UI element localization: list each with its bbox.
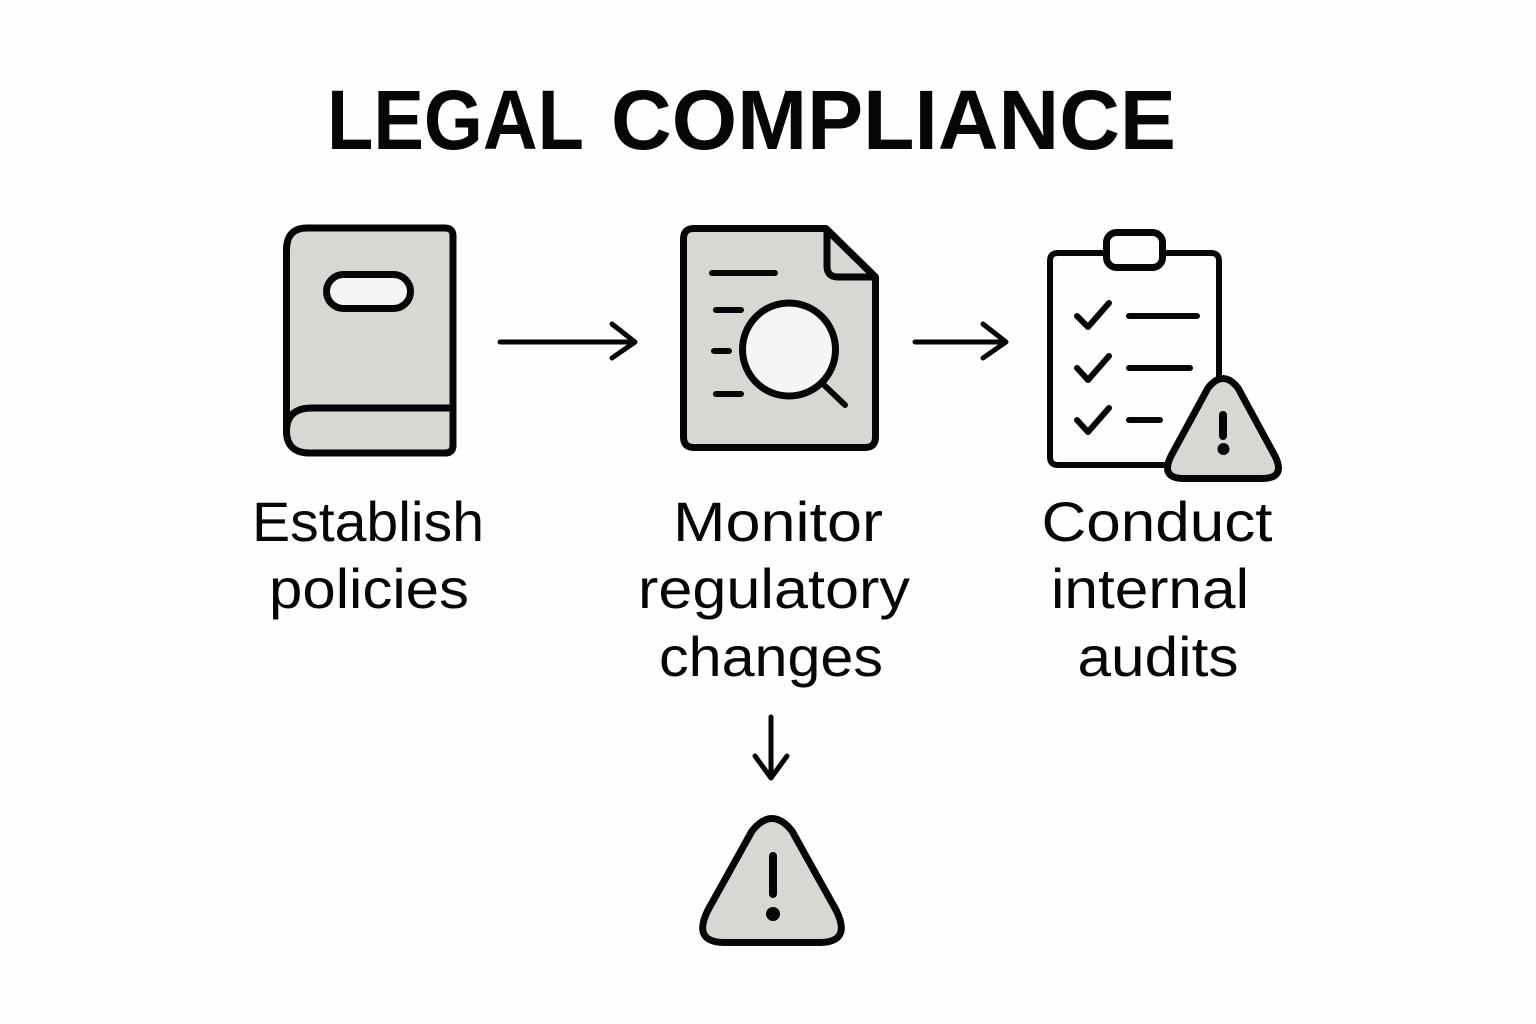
arrow: monitor to audits (915, 324, 1006, 358)
label: conduct internal audits: internal (1051, 557, 1249, 620)
title (327, 73, 1176, 167)
arrow: down to warning (755, 717, 787, 778)
label: monitor regulatory changes (638, 490, 910, 688)
label: establish policies (252, 490, 484, 620)
label: conduct internal audits: Conduct (1042, 490, 1273, 553)
arrow: policies to monitor (500, 324, 635, 358)
label: monitor regulatory changes: changes (659, 625, 883, 688)
label: establish policies: policies (269, 557, 469, 620)
label: monitor regulatory changes: regulatory (638, 557, 910, 620)
label: conduct internal audits: audits (1078, 625, 1238, 688)
icon: audit checklist with warning (1050, 232, 1278, 478)
icon: warning triangle (703, 818, 841, 942)
icon: document with magnifier (684, 228, 876, 448)
label: conduct internal audits (1042, 490, 1273, 688)
icon: policy book (286, 228, 453, 453)
label: establish policies: Establish (252, 490, 484, 553)
label: monitor regulatory changes: Monitor (673, 490, 883, 553)
title: COMPLIANCE (611, 73, 1176, 167)
title: LEGAL (327, 73, 584, 167)
